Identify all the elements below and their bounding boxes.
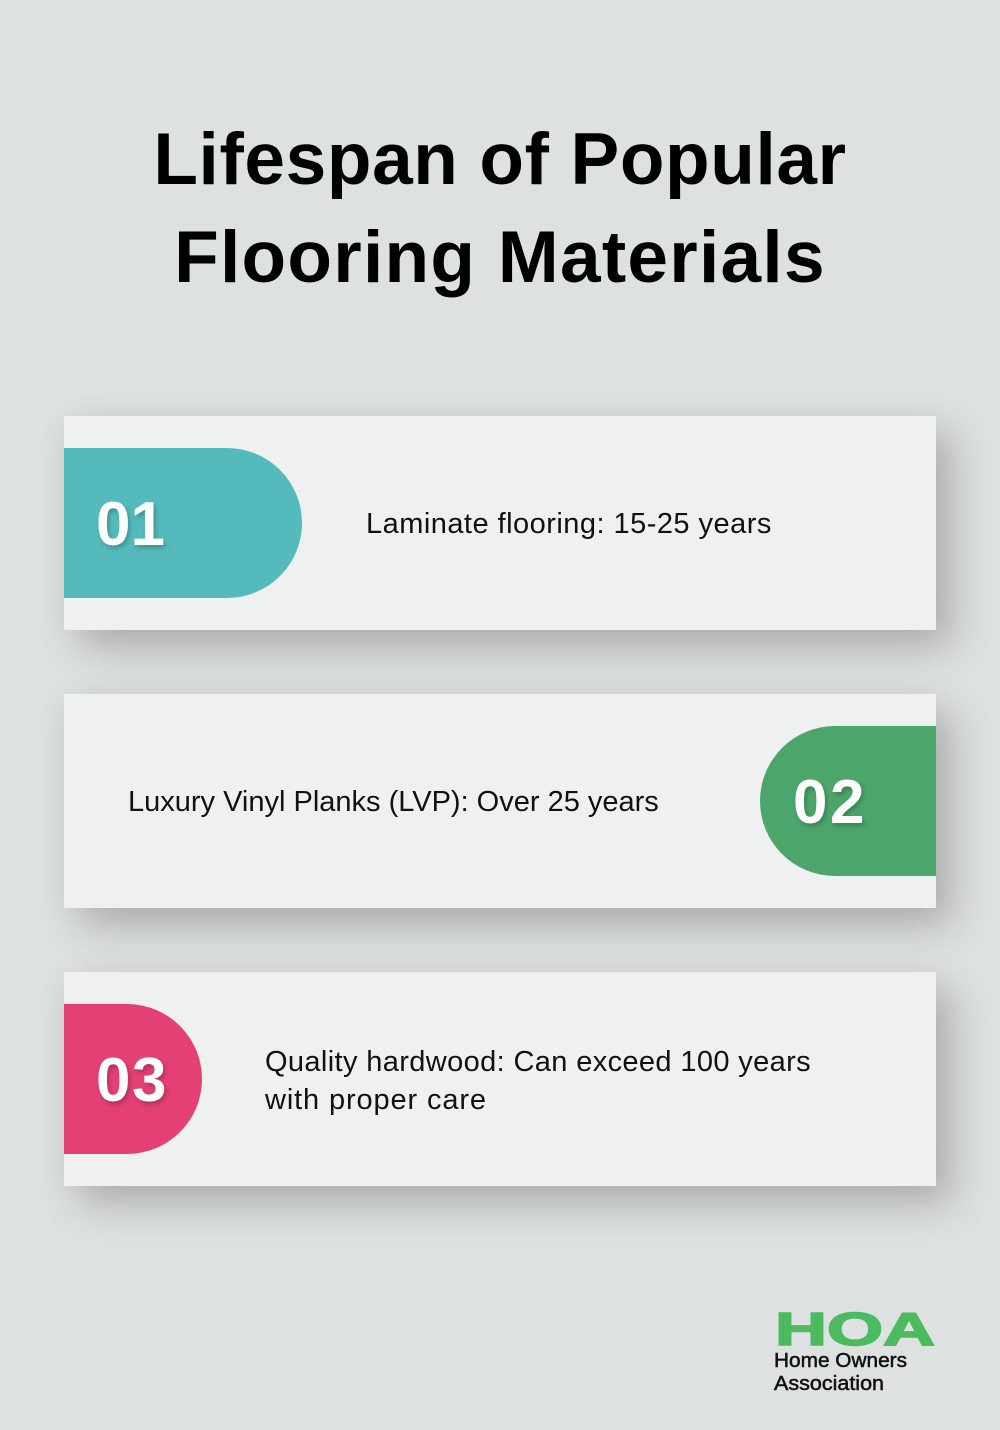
badge: 02: 02 <box>793 768 867 837</box>
badge: 03: 03 <box>96 1046 168 1115</box>
logo text: Association: Association <box>774 1373 884 1395</box>
panel: luxury vinyl planks <box>64 694 936 908</box>
badge: 02 <box>760 726 936 876</box>
panel: laminate flooring <box>64 416 936 630</box>
logo: HOA Home Owners Association <box>774 1305 935 1395</box>
logo text: Home Owners: Home Owners <box>774 1350 907 1372</box>
panel: quality hardwood <box>64 972 936 1186</box>
text: LVP lifespan: Luxury Vinyl Planks (LVP): Over 25 years <box>128 786 659 818</box>
title <box>153 119 847 298</box>
text: hardwood lifespan <box>265 1046 811 1116</box>
title: Flooring Materials <box>174 217 826 298</box>
title: Lifespan of Popular <box>153 119 847 200</box>
text: hardwood lifespan: Quality hardwood: Can exceed 100 years <box>265 1046 811 1078</box>
badge: 01 <box>64 448 302 598</box>
badge: 03 <box>64 1004 202 1154</box>
badge: 01: 01 <box>96 490 165 559</box>
text: laminate flooring lifespan: Laminate flooring: 15-25 years <box>366 508 772 540</box>
text: hardwood lifespan: with proper care <box>265 1084 487 1116</box>
